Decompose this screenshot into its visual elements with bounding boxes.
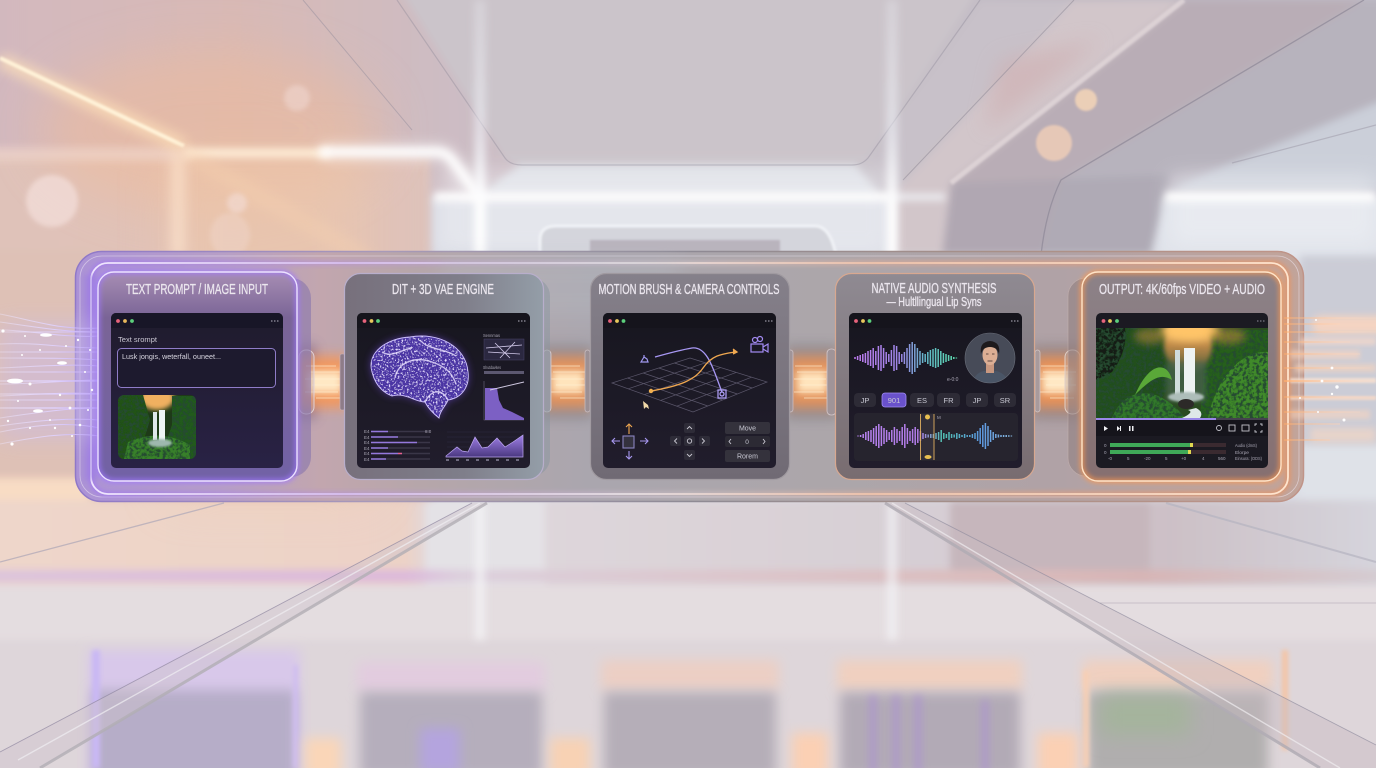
audio level meters: -0 — [1108, 456, 1112, 461]
app window — [111, 313, 283, 468]
icon: start point and cursor — [643, 389, 653, 409]
language chips: JP — [861, 396, 869, 405]
audio level meters: 560 — [1218, 456, 1226, 461]
side panel: histogram: Shutdavites — [483, 365, 502, 370]
card body — [836, 274, 1034, 480]
waveform: synthesized speech — [855, 342, 956, 374]
audio level meters: 5 — [1165, 456, 1168, 461]
perspective grid — [612, 358, 767, 412]
floor rails — [0, 503, 1376, 768]
audio level meters: Elorpe — [1235, 450, 1250, 455]
video frame: jungle waterfall — [1096, 328, 1268, 418]
floor reflections of the cards — [88, 650, 1288, 768]
language chips: SR — [1000, 396, 1011, 405]
area chart — [446, 432, 524, 460]
language chips: JP — [973, 396, 981, 405]
app window — [357, 313, 530, 468]
audio level meters: 0 — [1104, 443, 1107, 448]
player controls — [1096, 420, 1268, 436]
language chips — [854, 393, 1016, 407]
audio level meters: 5 — [1127, 456, 1130, 461]
timeline panel: M — [937, 415, 941, 420]
prompt label: Text srompt — [118, 337, 157, 344]
progress bars — [364, 429, 432, 462]
output light stream, right — [1284, 316, 1376, 442]
panel: output 4K 60fps video plus audio — [1068, 272, 1281, 481]
arrow: camera path — [655, 348, 722, 392]
panel: motion brush and camera controls — [590, 274, 790, 480]
audio level meters — [1104, 443, 1262, 461]
heading: — Hultllingual Lip Syns — [886, 295, 982, 309]
progress bars: E4 — [364, 429, 370, 434]
audio level meters: Audio (dmS) — [1235, 443, 1257, 448]
button: rorem — [725, 450, 770, 462]
panel: text prompt / image input — [98, 272, 311, 481]
prompt input box: Lusk jongis, weterfall, ouneet... — [122, 352, 221, 361]
progress scrubber — [1096, 418, 1268, 420]
card body — [590, 274, 790, 480]
icon: small subject — [641, 355, 648, 362]
panel: native audio synthesis — [836, 274, 1034, 480]
language chips: FR — [944, 396, 954, 405]
app window — [603, 313, 776, 468]
heading — [872, 280, 996, 309]
arrow: motion brush path — [651, 349, 737, 391]
heading: NATIVE AUDIO SYNTHESIS — [872, 280, 996, 297]
icon: cube target — [718, 390, 726, 398]
heading: MOTION BRUSH & CAMERA CONTROLS — [598, 281, 780, 298]
icon: wireframe brain — [371, 336, 468, 418]
audio level meters: -20 — [1144, 456, 1151, 461]
connector 4 — [1032, 345, 1082, 419]
app window — [1096, 313, 1268, 468]
portrait avatar — [965, 333, 1015, 385]
audio level meters: 0 — [1104, 450, 1107, 455]
heading: TEXT PROMPT / IMAGE INPUT — [126, 281, 268, 298]
button: rorem: Rorem — [737, 454, 758, 460]
input light stream, left — [0, 314, 100, 446]
side panel: network view — [483, 333, 524, 360]
app window — [849, 313, 1022, 468]
progress bars: E4 — [364, 440, 370, 445]
card body — [344, 274, 550, 480]
timeline panel — [854, 413, 1018, 461]
heading: DIT + 3D VAE ENGINE — [392, 281, 494, 298]
waterfall thumbnail — [118, 395, 196, 459]
progress bars: 8:0 — [425, 429, 432, 434]
stepper — [725, 436, 770, 447]
language chips: ES — [917, 396, 927, 405]
progress bars: E4 — [364, 457, 370, 462]
card body — [1068, 272, 1281, 481]
icon: movie camera — [751, 336, 768, 352]
audio level meters: +0 — [1181, 456, 1187, 461]
button: move — [725, 422, 770, 434]
direction pad — [670, 423, 710, 460]
audio level meters: 4 — [1202, 456, 1205, 461]
stepper: 0 — [745, 439, 749, 446]
progress bars: E4 — [364, 435, 370, 440]
button: move: Move — [739, 426, 756, 432]
progress bars: E4 — [364, 446, 370, 451]
time readout: e-0:0 — [947, 377, 959, 383]
panel: DiT + 3D VAE engine — [344, 274, 550, 480]
card body — [98, 272, 311, 481]
connector 3 — [786, 345, 838, 419]
heading: OUTPUT: 4K/60fps VIDEO + AUDIO — [1099, 281, 1265, 298]
connector 1 — [296, 345, 348, 419]
move gizmo — [612, 424, 648, 459]
glass frame holding the pipeline — [75, 251, 1304, 502]
prompt input box — [118, 348, 276, 388]
side panel: network view: Sennmas — [483, 333, 501, 338]
side panel: histogram — [483, 365, 524, 420]
language chips: 901 — [888, 396, 900, 405]
audio level meters: Einsura: (ODS) — [1235, 456, 1262, 461]
progress bars: E4 — [364, 451, 370, 456]
connector 2 — [540, 345, 592, 419]
